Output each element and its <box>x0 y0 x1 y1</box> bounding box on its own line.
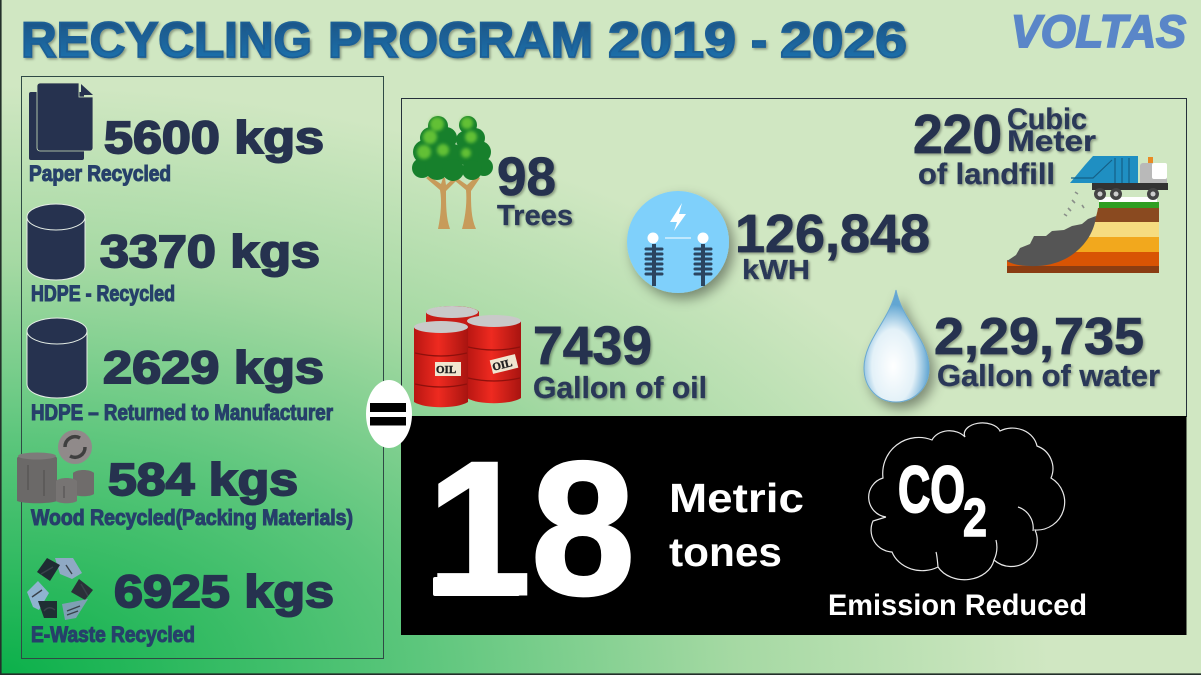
icon: garbage truck on landfill <box>1007 156 1168 273</box>
stat: trees: 98 <box>497 147 556 207</box>
label: cubic: Cubic <box>1007 103 1087 136</box>
stat: landfill: 220 <box>913 103 1002 165</box>
text: subscript 2: 2 <box>963 488 987 548</box>
stat: metric tones: 18 <box>427 423 635 635</box>
title: PROGRAM <box>328 12 593 68</box>
icon: CO2 cloud <box>869 423 1065 580</box>
text: CO: CO <box>898 452 965 526</box>
icon: e-waste recycle symbol <box>27 558 93 620</box>
title: - <box>751 12 767 68</box>
label: paper: Paper Recycled <box>29 161 171 186</box>
label: e-waste: E-Waste Recycled <box>31 622 195 647</box>
icon: trees <box>412 116 493 229</box>
icon: oil barrels: OIL <box>436 364 456 376</box>
logo: Voltas: VOLTAS <box>1011 6 1186 57</box>
icon: oil barrels <box>414 306 521 407</box>
icon: water drop <box>864 290 929 402</box>
stat: HDPE returned amount: 2629 kgs <box>103 342 324 393</box>
title: RECYCLING <box>21 12 312 68</box>
label: energy: kWH <box>742 254 810 285</box>
label: HDPE returned: HDPE – Returned to Manufacturer <box>31 400 333 425</box>
label: emission reduced: Emission Reduced <box>828 589 1087 622</box>
panel: recycled materials <box>17 76 384 658</box>
stat: energy: 126,848 <box>735 204 930 264</box>
icon: power lines <box>627 191 729 293</box>
label: tones: tones <box>669 529 782 575</box>
panel: savings <box>402 98 1186 416</box>
label: water: Gallon of water <box>937 358 1160 393</box>
stat: wood amount: 584 kgs <box>108 454 298 505</box>
icon: HDPE drum <box>27 204 85 280</box>
stat: e-waste amount: 6925 kgs <box>114 566 334 617</box>
stat: HDPE recycled amount: 3370 kgs <box>100 226 320 277</box>
label: wood: Wood Recycled(Packing Materials) <box>31 505 353 530</box>
icon: paper <box>29 83 93 160</box>
stat: paper amount: 5600 kgs <box>104 112 324 163</box>
icon: HDPE returned drum <box>27 318 87 398</box>
label: of landfill: of landfill <box>918 158 1055 191</box>
title: 2026 <box>780 12 907 68</box>
label: oil: Gallon of oil <box>533 370 707 405</box>
equals sign <box>366 380 412 448</box>
panel: emissions <box>401 416 1186 635</box>
stat: oil: 7439 <box>533 316 652 376</box>
stat: water: 2,29,735 <box>934 308 1144 366</box>
label: metric: Metric <box>669 475 804 521</box>
title: 2019 <box>608 12 736 68</box>
label: meter: Meter <box>1007 125 1096 158</box>
label: trees: Trees <box>497 200 573 232</box>
icon: wood logs <box>17 430 94 503</box>
icon: oil barrels: OIL <box>491 357 514 374</box>
label: HDPE recycled: HDPE - Recycled <box>31 281 175 306</box>
